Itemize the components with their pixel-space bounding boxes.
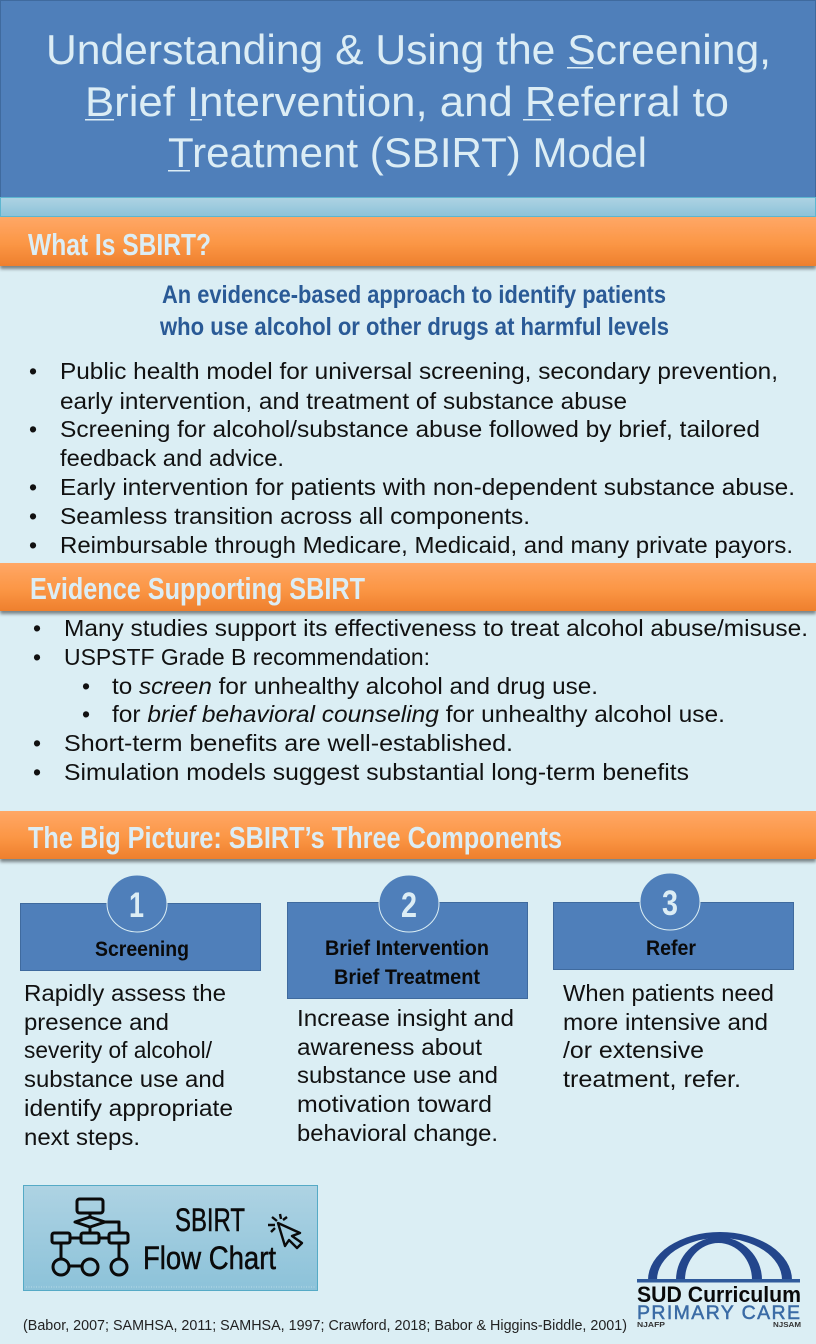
bullet list: what is SBIRT: Seamless transition across all components. bbox=[60, 503, 530, 529]
component 2: brief intervention: motivation toward bbox=[297, 1091, 492, 1117]
bullet list: what is SBIRT: • bbox=[29, 503, 37, 529]
section banner: Big Picture bbox=[0, 811, 816, 859]
bullet list: evidence: • bbox=[33, 730, 41, 756]
component 1: screening: substance use and bbox=[24, 1066, 225, 1092]
bullet list: evidence: Simulation models suggest substantial long-term benefits bbox=[64, 759, 689, 785]
bullet list: evidence: Short-term benefits are well-established. bbox=[64, 730, 513, 756]
component 3: refer: 3 bbox=[662, 884, 678, 923]
title: Treatment (SBIRT) Model bbox=[168, 129, 647, 176]
button: SBIRT flow chart bbox=[24, 1186, 318, 1290]
bullet list: evidence: for brief behavioral counseling for unhealthy alcohol use. bbox=[112, 701, 725, 727]
bullet list: what is SBIRT: Public health model for universal screening, secondary prevention, bbox=[60, 358, 778, 384]
component 1: screening: 1 bbox=[129, 886, 144, 925]
section banner: What Is SBIRT bbox=[0, 217, 816, 266]
component 3: refer: more intensive and bbox=[563, 1009, 768, 1035]
component 2: brief intervention: substance use and bbox=[297, 1062, 498, 1088]
logo: SUD Curriculum Primary Care: SUD Curriculum bbox=[637, 1282, 801, 1307]
subheading: definition: An evidence-based approach to identify patients bbox=[162, 281, 666, 309]
component 2: brief intervention: awareness about bbox=[297, 1034, 483, 1060]
component 3: refer: Refer bbox=[646, 937, 696, 960]
bullet list: what is SBIRT bbox=[29, 358, 795, 558]
component 2: brief intervention: Brief Treatment bbox=[334, 966, 480, 989]
section banner: What Is SBIRT: What Is SBIRT? bbox=[28, 227, 211, 262]
bullet list: evidence: • bbox=[33, 615, 41, 641]
component 1: screening bbox=[20, 875, 260, 1150]
bullet list: what is SBIRT: • bbox=[29, 416, 37, 442]
logo: SUD Curriculum Primary Care: PRIMARY CARE bbox=[637, 1302, 800, 1324]
title: Brief Intervention, and Referral to bbox=[85, 78, 729, 125]
bullet list: what is SBIRT: • bbox=[29, 358, 37, 384]
component 1: screening: severity of alcohol/ bbox=[24, 1037, 213, 1063]
bullet list: what is SBIRT: Reimbursable through Medicare, Medicaid, and many private payors. bbox=[60, 532, 793, 558]
section banner: Big Picture: The Big Picture: SBIRT’s Three Components bbox=[28, 820, 562, 855]
bullet list: what is SBIRT: feedback and advice. bbox=[60, 445, 284, 471]
header panel bbox=[0, 0, 816, 216]
bullet list: what is SBIRT: • bbox=[29, 474, 37, 500]
bullet list: evidence: • bbox=[33, 644, 41, 670]
component 2: brief intervention bbox=[288, 875, 528, 1146]
icon: mouse cursor bbox=[268, 1214, 302, 1248]
component 3: refer bbox=[554, 873, 794, 1092]
bullet list: evidence: • bbox=[82, 673, 90, 699]
component 1: screening: Rapidly assess the bbox=[24, 980, 226, 1006]
title bbox=[46, 26, 771, 176]
logo: SUD Curriculum Primary Care: NJSAM bbox=[773, 1320, 801, 1329]
component 1: screening: presence and bbox=[24, 1009, 169, 1035]
subheading: definition: who use alcohol or other drugs at harmful levels bbox=[159, 313, 669, 341]
component 3: refer: When patients need bbox=[563, 980, 774, 1006]
bullet list: evidence bbox=[33, 615, 808, 785]
component 1: screening: identify appropriate bbox=[24, 1095, 233, 1121]
component 3: refer: treatment, refer. bbox=[563, 1066, 741, 1092]
button: SBIRT flow chart: SBIRT bbox=[175, 1202, 245, 1238]
component 2: brief intervention: Brief Intervention bbox=[325, 937, 489, 960]
logo: SUD Curriculum Primary Care bbox=[637, 1232, 801, 1329]
bullet list: what is SBIRT: Early intervention for patients with non-dependent substance abuse. bbox=[60, 474, 795, 500]
section banner: Evidence bbox=[0, 563, 816, 611]
bullet list: evidence: to screen for unhealthy alcohol and drug use. bbox=[112, 673, 598, 699]
bullet list: evidence: • bbox=[82, 701, 90, 727]
logo: SUD Curriculum Primary Care: NJAFP bbox=[637, 1320, 665, 1329]
icon: flow chart bbox=[52, 1199, 128, 1275]
component 3: refer: /or extensive bbox=[563, 1037, 704, 1063]
bullet list: what is SBIRT: early intervention, and treatment of substance abuse bbox=[60, 388, 627, 414]
bullet list: what is SBIRT: • bbox=[29, 532, 37, 558]
component 1: screening: Screening bbox=[95, 938, 189, 961]
bullet list: evidence: USPSTF Grade B recommendation: bbox=[64, 644, 430, 670]
bullet list: evidence: • bbox=[33, 759, 41, 785]
bullet list: evidence: Many studies support its effectiveness to treat alcohol abuse/misuse. bbox=[64, 615, 808, 641]
subheading: definition bbox=[159, 281, 669, 341]
component 2: brief intervention: Increase insight and bbox=[297, 1005, 514, 1031]
section banner: Evidence: Evidence Supporting SBIRT bbox=[30, 571, 365, 606]
component 2: brief intervention: behavioral change. bbox=[297, 1120, 498, 1146]
citation: (Babor, 2007; SAMHSA, 2011; SAMHSA, 1997; Crawford, 2018; Babor & Higgins-Biddle, 2001) bbox=[23, 1318, 627, 1334]
component 2: brief intervention: 2 bbox=[401, 886, 417, 925]
component 1: screening: next steps. bbox=[24, 1124, 140, 1150]
button: SBIRT flow chart: Flow Chart bbox=[143, 1240, 276, 1276]
title: Understanding & Using the Screening, bbox=[46, 26, 771, 73]
bullet list: what is SBIRT: Screening for alcohol/substance abuse followed by brief, tailored bbox=[60, 416, 760, 442]
